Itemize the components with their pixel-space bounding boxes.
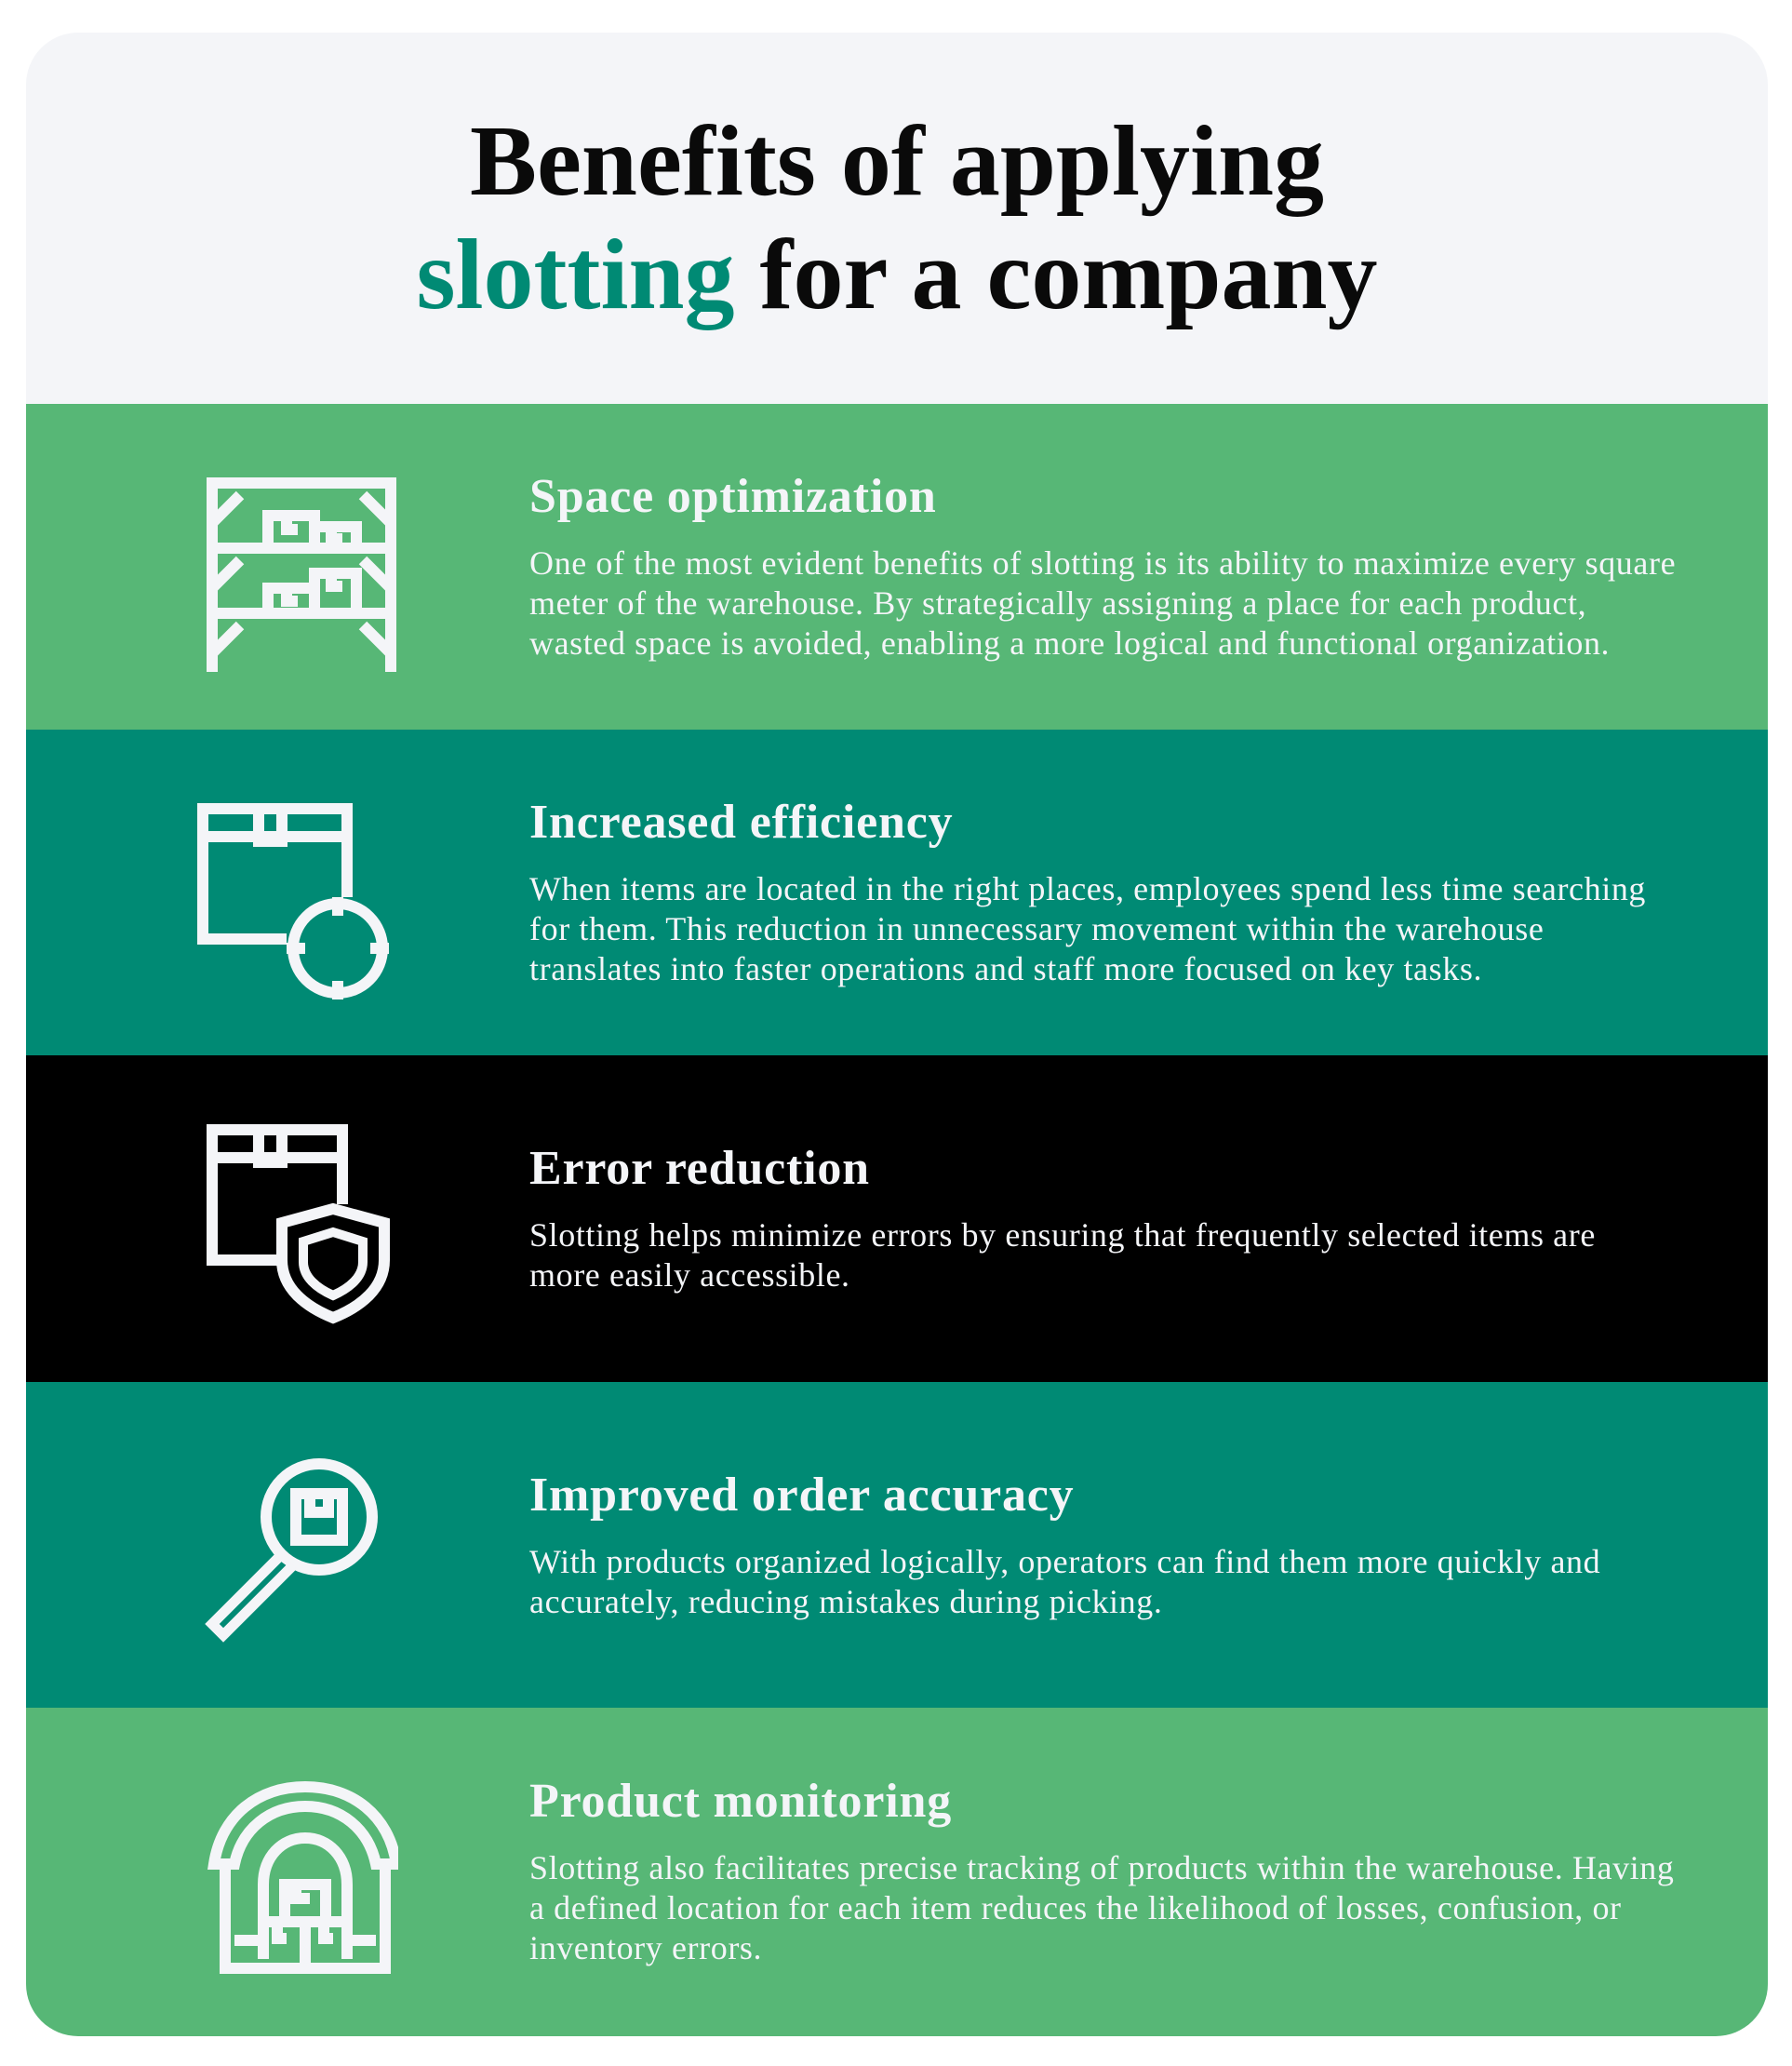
panel: order accuracy [26, 1382, 1768, 1709]
title [416, 106, 1378, 330]
text block [529, 1141, 1596, 1294]
text block: With products organized logically, operators can find them more quickly and [529, 1543, 1600, 1580]
text block: Slotting helps minimize errors by ensuring that frequently selected items are [529, 1215, 1596, 1253]
icon: box with shield [207, 1124, 390, 1323]
text block: Error reduction [529, 1141, 870, 1195]
title: Benefits of applying [470, 106, 1324, 217]
text block: One of the most evident benefits of slotting is its ability to maximize every square [529, 544, 1676, 582]
icon: shelving [207, 477, 396, 672]
text block: a defined location for each item reduces the likelihood of losses, confusion, or [529, 1889, 1622, 1926]
text block: inventory errors. [529, 1929, 762, 1966]
panel: space optimization [26, 404, 1768, 731]
text block: meter of the warehouse. By strategically assigning a place for each product, [529, 584, 1586, 622]
text block: Slotting also facilitates precise tracking of products within the warehouse. Having [529, 1849, 1675, 1886]
panel: increased efficiency [26, 730, 1768, 1056]
text block: for them. This reduction in unnecessary movement within the warehouse [529, 910, 1544, 947]
icon: magnifier with box [205, 1458, 378, 1643]
text block: Space optimization [529, 470, 937, 523]
panel: error reduction [26, 1055, 1768, 1382]
text block: When items are located in the right places, employees spend less time searching [529, 870, 1646, 907]
text block: wasted space is avoided, enabling a more logical and functional organization. [529, 624, 1610, 662]
icon: box with target [197, 803, 389, 999]
text block: accurately, reducing mistakes during picking. [529, 1582, 1162, 1619]
text block [529, 1469, 1600, 1619]
icon: warehouse arch [207, 1781, 398, 1974]
text block: Increased efficiency [529, 796, 953, 849]
text block [529, 470, 1676, 662]
text block: Product monitoring [529, 1775, 952, 1828]
text block [529, 796, 1646, 987]
text block: more easily accessible. [529, 1256, 850, 1294]
text block: Improved order accuracy [529, 1469, 1074, 1521]
panel: product monitoring [26, 1708, 1768, 2036]
title: slotting for a company [416, 220, 1378, 330]
text block [529, 1775, 1675, 1966]
text block: translates into faster operations and staff more focused on key tasks. [529, 950, 1482, 987]
